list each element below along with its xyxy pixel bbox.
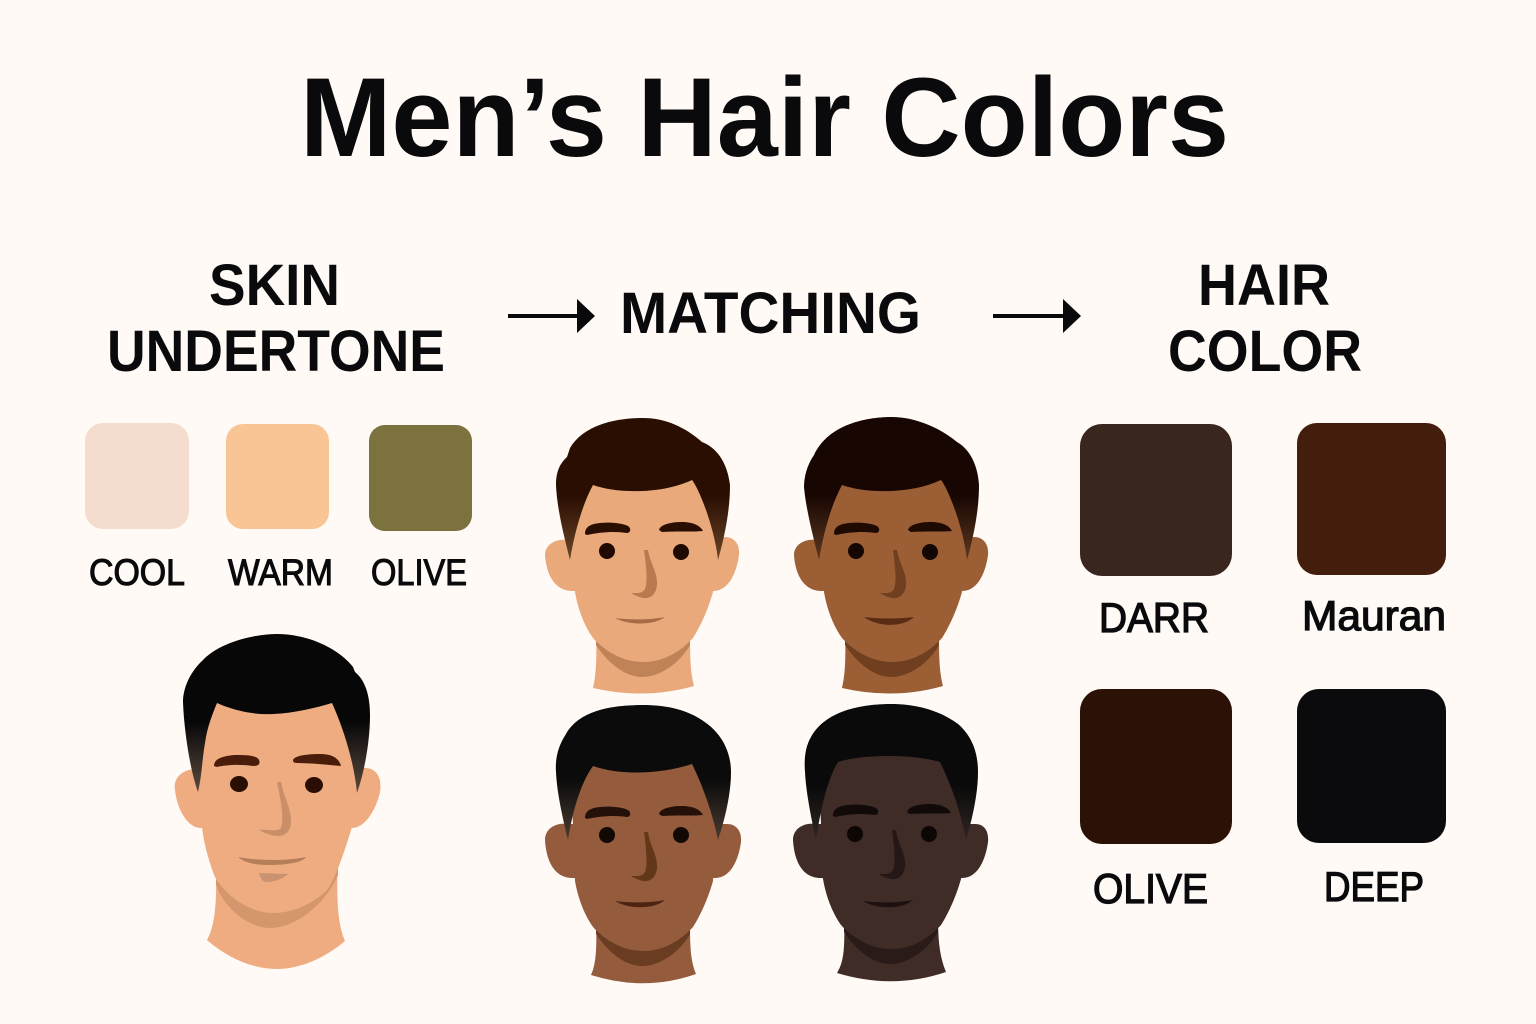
hair bbox=[556, 705, 731, 840]
face bbox=[818, 742, 968, 949]
hair bbox=[183, 634, 370, 793]
face bbox=[570, 465, 720, 662]
mouth bbox=[863, 900, 913, 907]
heading: skin undertone: UNDERTONE bbox=[107, 319, 445, 384]
nose bbox=[631, 550, 657, 598]
panel: hair color swatches bbox=[1080, 423, 1446, 912]
heading: hair color: HAIR bbox=[1198, 253, 1330, 318]
neck shadow bbox=[216, 860, 338, 928]
neck bbox=[837, 917, 946, 981]
illustration: medium-tan skin with near-black brown hair bbox=[794, 417, 988, 694]
swatch: olive hair bbox=[1080, 689, 1232, 844]
eyes bbox=[847, 826, 937, 842]
label: olive: OLIVE bbox=[371, 552, 467, 593]
mouth bbox=[615, 617, 665, 624]
face bbox=[819, 465, 969, 662]
illustration: light skin with dark brown hair bbox=[545, 418, 739, 694]
neck shadow bbox=[596, 633, 690, 677]
mouth bbox=[238, 857, 306, 865]
neck shadow bbox=[845, 633, 939, 677]
label: warm: WARM bbox=[228, 552, 333, 593]
neck bbox=[593, 630, 694, 694]
eyes bbox=[848, 543, 938, 560]
arrow: matching to hair color bbox=[993, 299, 1081, 333]
neck bbox=[591, 919, 696, 983]
arrow: skin to matching bbox=[508, 299, 595, 333]
eyebrows bbox=[833, 804, 951, 817]
swatch: olive bbox=[369, 425, 472, 531]
face bbox=[570, 744, 720, 951]
neck shadow bbox=[596, 922, 690, 966]
heading: hair color bbox=[1168, 253, 1362, 384]
nose bbox=[631, 832, 657, 881]
illustration: large face with black hair bbox=[175, 634, 380, 969]
eyes bbox=[599, 827, 689, 843]
nose bbox=[259, 782, 291, 836]
ears bbox=[794, 537, 988, 591]
ears bbox=[545, 824, 741, 878]
label: deep: DEEP bbox=[1324, 863, 1424, 910]
neck bbox=[842, 630, 943, 694]
nose bbox=[880, 550, 906, 598]
swatch: cool bbox=[85, 423, 189, 529]
label: cool: COOL bbox=[89, 552, 185, 593]
ears bbox=[793, 824, 988, 878]
illustration: brown skin with black hair bbox=[545, 705, 741, 983]
eyebrows bbox=[585, 522, 703, 535]
ears bbox=[545, 537, 739, 591]
label: mauran: Mauran bbox=[1302, 592, 1446, 639]
heading: hair color: COLOR bbox=[1168, 319, 1362, 384]
ears bbox=[175, 768, 380, 828]
title: Men’s Hair Colors bbox=[300, 55, 1229, 180]
nose bbox=[879, 830, 905, 879]
hair bbox=[805, 704, 978, 840]
swatch: darr bbox=[1080, 424, 1232, 576]
eyes bbox=[230, 776, 323, 793]
face bbox=[200, 690, 357, 913]
heading: skin undertone bbox=[107, 253, 445, 384]
neck bbox=[207, 860, 345, 969]
mouth bbox=[615, 900, 665, 907]
mouth bbox=[864, 617, 914, 625]
heading: matching: MATCHING bbox=[620, 281, 921, 346]
label: darr: DARR bbox=[1099, 594, 1209, 641]
hair bbox=[556, 418, 730, 560]
swatch: warm bbox=[226, 424, 329, 529]
eyebrows bbox=[834, 522, 952, 535]
eyebrows bbox=[214, 754, 341, 767]
hair bbox=[804, 417, 979, 560]
illustration: deep skin with black hair bbox=[793, 704, 988, 981]
neck shadow bbox=[844, 920, 938, 964]
under lip bbox=[259, 873, 288, 882]
label: olive hair: OLIVE bbox=[1093, 865, 1208, 912]
swatch: deep bbox=[1297, 689, 1446, 843]
eyebrows bbox=[585, 806, 703, 819]
eyes bbox=[599, 543, 689, 560]
panel: skin undertone swatches bbox=[85, 423, 472, 593]
heading: skin undertone: SKIN bbox=[209, 253, 340, 318]
swatch: mauran bbox=[1297, 423, 1446, 575]
